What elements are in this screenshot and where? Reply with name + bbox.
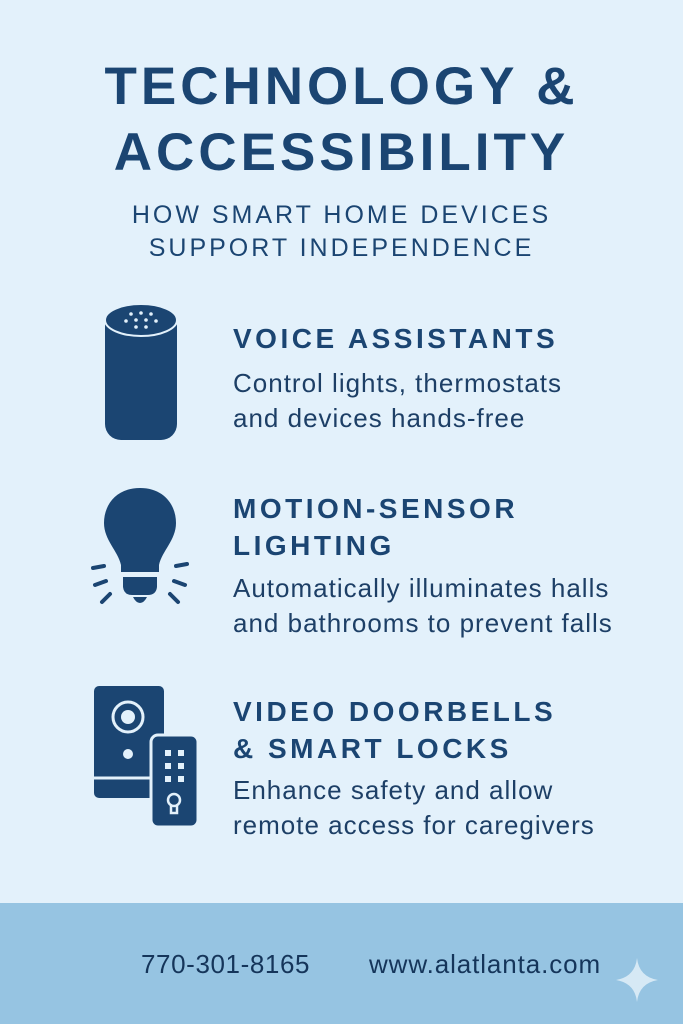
text: voice assistants — [233, 368, 562, 433]
icon: smart speaker — [105, 305, 177, 440]
text: motion-sensor lighting — [233, 573, 613, 638]
heading: video doorbells: & SMART LOCKS — [233, 733, 512, 764]
text: motion-sensor lighting: and bathrooms to prevent falls — [233, 608, 613, 638]
heading: motion-sensor lighting: LIGHTING — [233, 530, 395, 561]
website: www.alatlanta.com — [369, 949, 601, 979]
title — [104, 57, 578, 182]
text: video doorbells — [233, 775, 595, 840]
icon: doorbell and lock — [94, 686, 196, 826]
text: video doorbells: remote access for caregivers — [233, 810, 595, 840]
heading: motion-sensor lighting: MOTION-SENSOR — [233, 493, 518, 524]
text: voice assistants: Control lights, thermostats — [233, 368, 562, 398]
heading: motion-sensor lighting — [233, 493, 518, 561]
subtitle: HOW SMART HOME DEVICES — [132, 201, 551, 229]
icon: light bulb — [91, 488, 189, 604]
heading: video doorbells — [233, 696, 556, 764]
phone: 770-301-8165 — [141, 949, 310, 979]
title: TECHNOLOGY & — [104, 57, 578, 116]
heading: video doorbells: VIDEO DOORBELLS — [233, 696, 556, 727]
icon: sparkle — [616, 958, 658, 1002]
text: video doorbells: Enhance safety and allow — [233, 775, 553, 805]
subtitle — [132, 201, 551, 262]
subtitle: SUPPORT INDEPENDENCE — [149, 234, 534, 262]
heading: voice assistants: VOICE ASSISTANTS — [233, 323, 558, 354]
title: ACCESSIBILITY — [114, 123, 569, 182]
footer — [0, 903, 683, 1024]
text: motion-sensor lighting: Automatically illuminates halls — [233, 573, 609, 603]
text: voice assistants: and devices hands-free — [233, 403, 525, 433]
